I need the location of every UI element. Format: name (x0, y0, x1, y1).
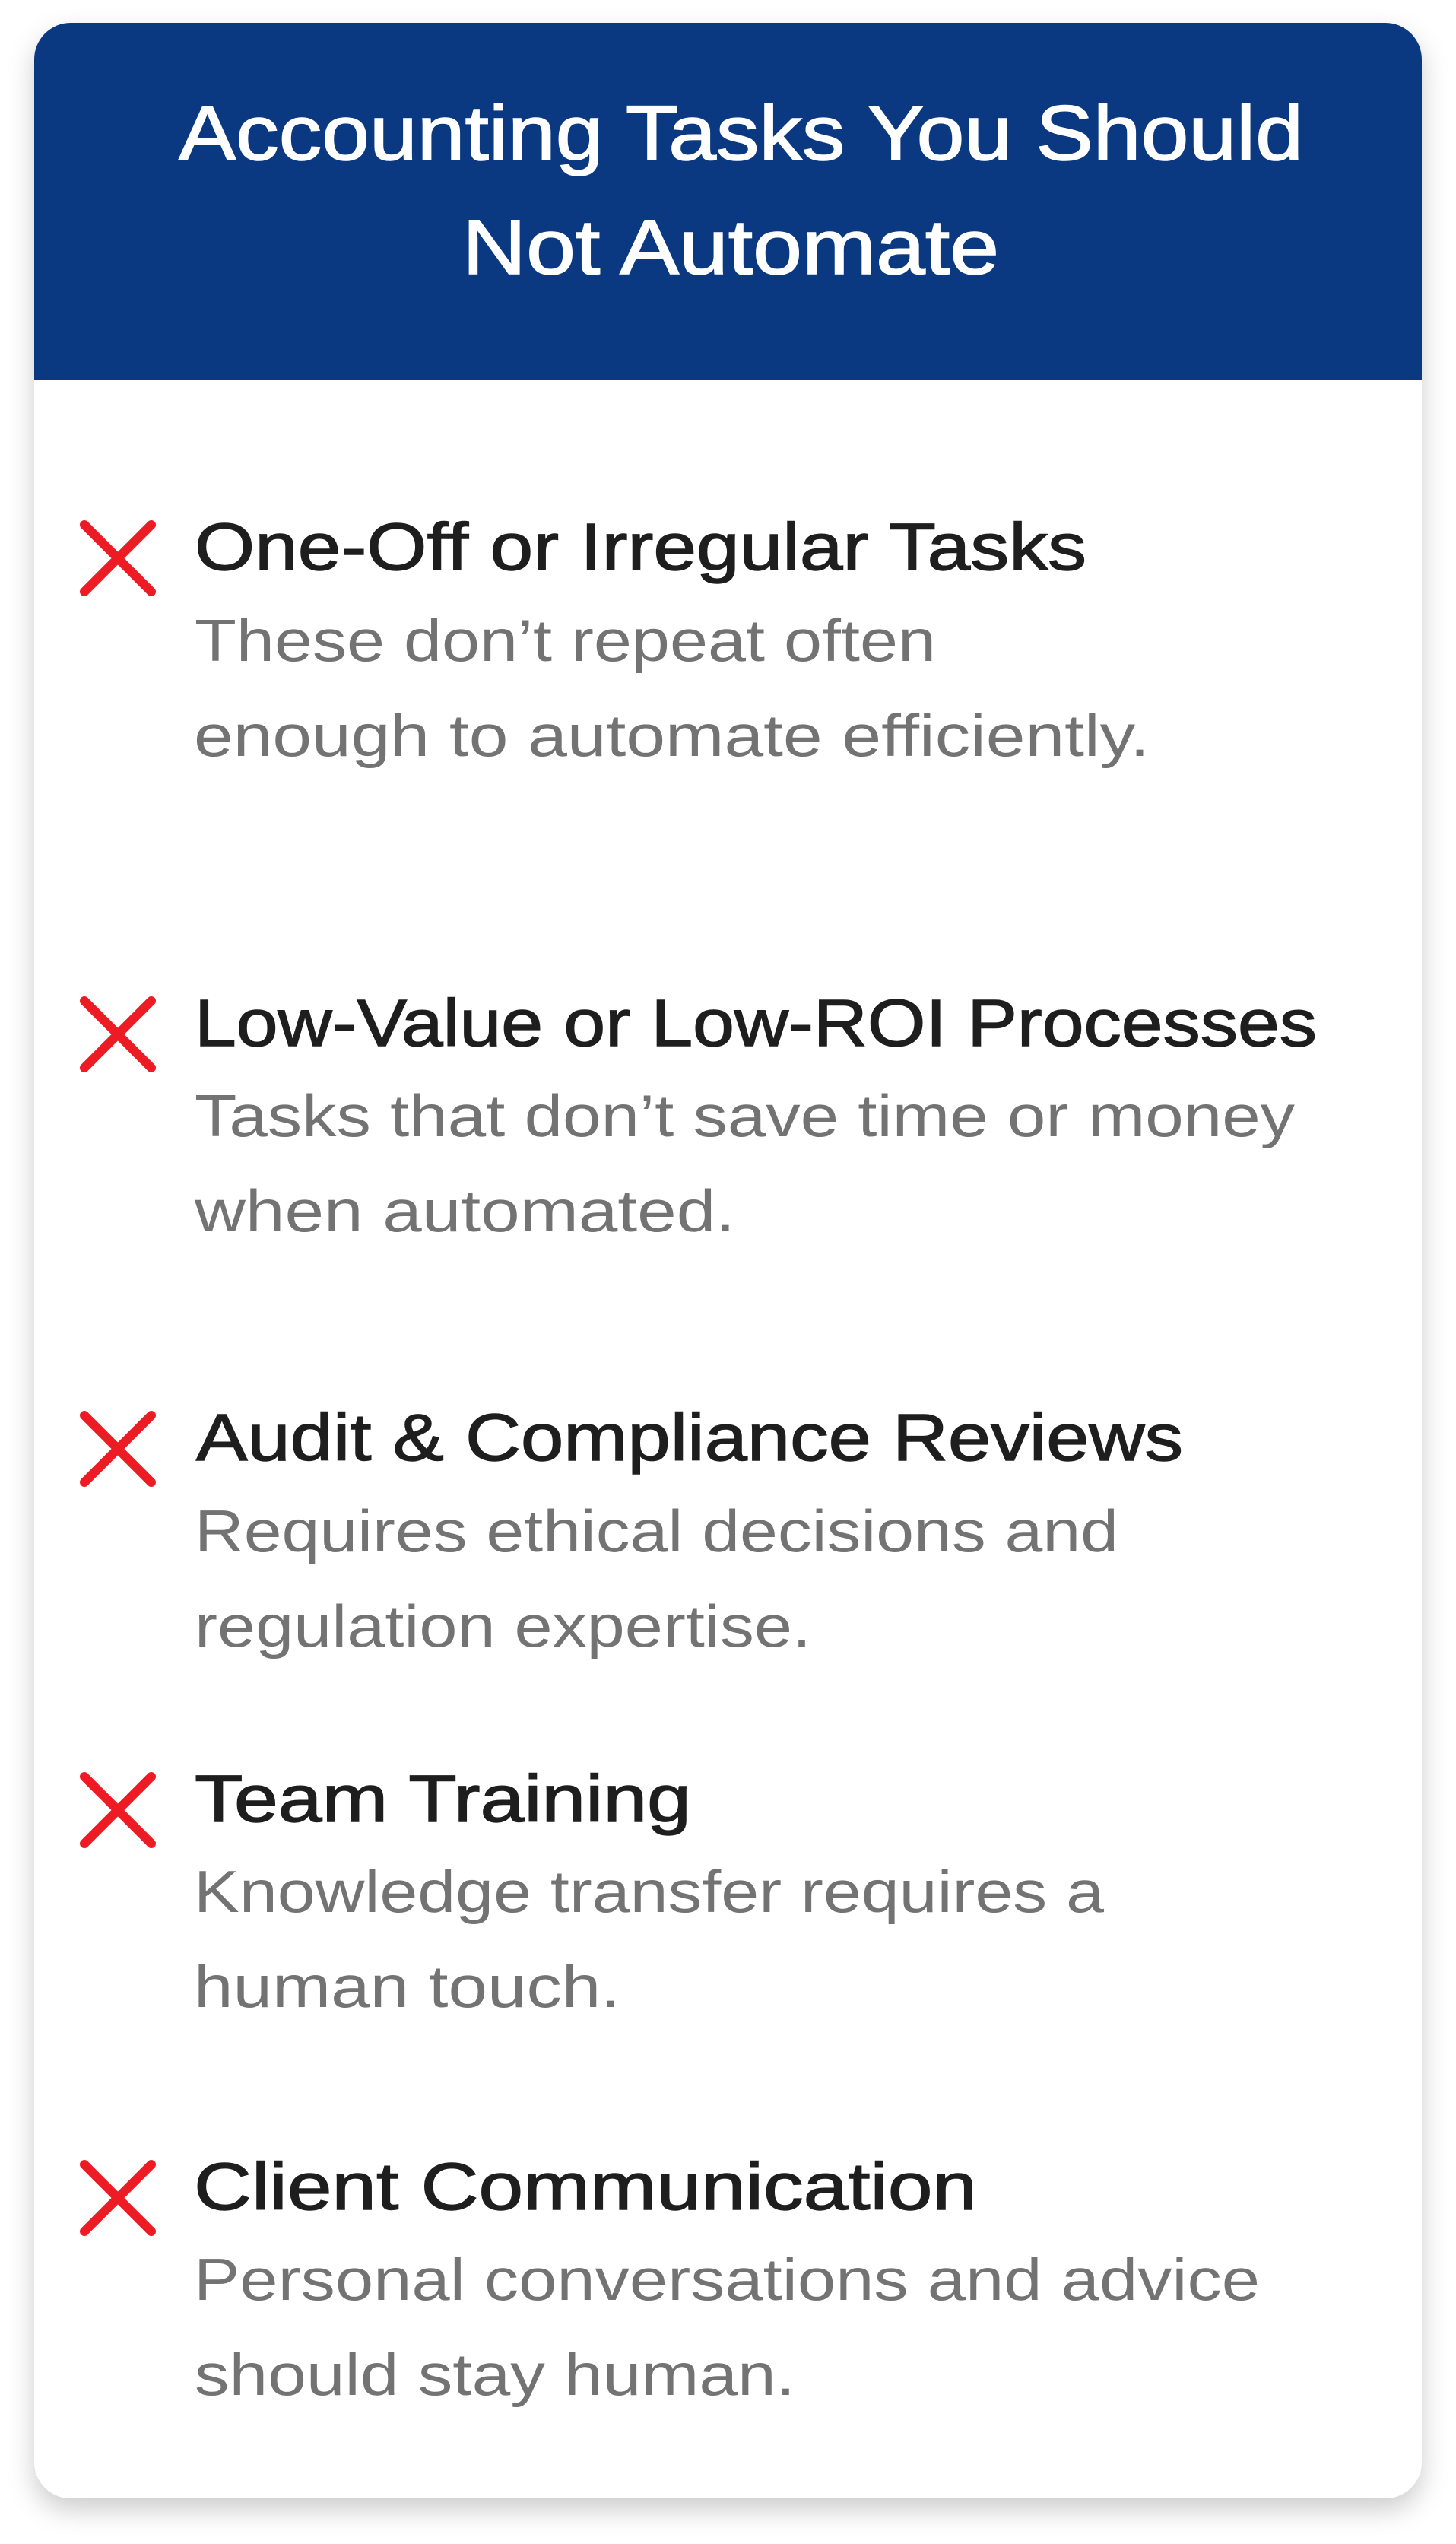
description: client communication: should stay human. (195, 2341, 795, 2408)
icon: red cross (84, 2164, 151, 2231)
description: low-value or low-roi processes: Tasks that don’t save time or money (195, 1082, 1295, 1149)
icon: red cross (84, 1415, 151, 1482)
description: client communication (194, 2246, 1260, 2408)
title: Accounting Tasks You Should (179, 90, 1303, 176)
description: one-off or irregular tasks (194, 607, 1150, 769)
icon: red cross (84, 525, 151, 592)
heading: one-off or irregular tasks: One-Off or Irregular Tasks (195, 510, 1086, 584)
description: audit and compliance reviews: Requires ethical decisions and (195, 1497, 1118, 1564)
icon: red cross (84, 1001, 151, 1068)
description: team training: Knowledge transfer requires a (194, 1858, 1105, 1925)
description: one-off or irregular tasks: enough to automate efficiently. (194, 702, 1150, 769)
item: audit and compliance reviews (84, 1401, 1183, 1659)
icon: red cross (84, 1777, 151, 1844)
item: low-value or low-roi processes (84, 986, 1317, 1244)
title (179, 90, 1303, 291)
description: audit and compliance reviews: regulation expertise. (195, 1593, 811, 1659)
item: client communication (84, 2150, 1260, 2408)
header band (34, 23, 1422, 380)
description: low-value or low-roi processes (194, 1082, 1295, 1244)
description: team training: human touch. (194, 1953, 620, 2020)
description: team training (194, 1858, 1105, 2020)
title: Not Automate (462, 204, 999, 291)
heading: client communication: Client Communication (194, 2150, 977, 2224)
heading: low-value or low-roi processes: Low-Value or Low-ROI Processes (195, 986, 1317, 1060)
heading: team training: Team Training (195, 1762, 691, 1836)
description: low-value or low-roi processes: when automated. (194, 1177, 735, 1244)
description: client communication: Personal conversations and advice (194, 2246, 1260, 2313)
item: team training (84, 1762, 1105, 2020)
description: audit and compliance reviews (195, 1497, 1118, 1659)
item: one-off or irregular tasks (84, 510, 1150, 769)
heading: audit and compliance reviews: Audit & Compliance Reviews (196, 1401, 1183, 1475)
description: one-off or irregular tasks: These don’t repeat often (195, 607, 936, 674)
